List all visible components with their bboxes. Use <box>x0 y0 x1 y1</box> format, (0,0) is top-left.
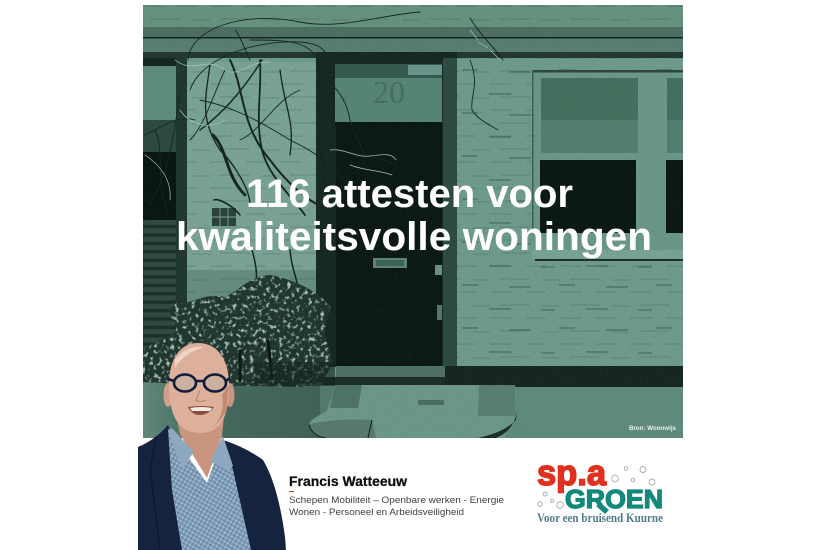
bubbles <box>538 466 655 508</box>
title: 116 attesten voor <box>246 172 573 216</box>
small window in pillar <box>212 208 236 226</box>
left shutter <box>143 220 176 350</box>
door surround <box>316 52 457 367</box>
portrait: Francis Watteeuw <box>138 343 286 550</box>
role description <box>289 495 504 518</box>
left upper panel and window <box>143 58 176 220</box>
dark plinth <box>445 366 683 387</box>
role description: Schepen Mobiliteit – Openbare werken - Energie <box>289 495 504 506</box>
door step <box>316 366 446 385</box>
title: kwaliteitsvolle woningen <box>176 215 652 259</box>
light vine sprigs <box>145 30 500 200</box>
tagline: Voor een bruisend Kuurne <box>537 511 663 525</box>
jacket lapel edge <box>150 437 160 550</box>
glasses <box>168 374 230 392</box>
nose <box>196 390 206 402</box>
upper brick band <box>143 5 683 58</box>
letter slot <box>373 258 407 268</box>
right brick wall <box>457 58 683 367</box>
photo: house facade with green duotone <box>140 5 683 438</box>
role description: Wonen - Personeel en Arbeidsveiligheid <box>289 507 464 518</box>
large right window <box>532 70 683 261</box>
neck <box>176 415 224 478</box>
smile <box>188 406 214 415</box>
red accent dash <box>289 491 294 492</box>
shrub <box>143 275 335 387</box>
vines over pillar <box>145 12 503 300</box>
door hardware <box>435 265 442 275</box>
pavement <box>143 382 683 438</box>
tail of R <box>596 504 609 514</box>
title <box>176 172 652 259</box>
photo credit: Bron: Woonwijs <box>629 425 677 432</box>
transom window with number 20: 20 <box>373 74 405 110</box>
jacket <box>138 425 286 550</box>
sp.a wordmark: sp.a <box>537 452 607 493</box>
curb and sidewalk island <box>309 385 518 438</box>
logo: sp.a Groen <box>537 452 663 525</box>
head <box>169 343 229 433</box>
door <box>336 126 442 366</box>
infographic canvas <box>138 5 683 550</box>
shirt <box>168 429 251 550</box>
brick pillar <box>187 62 316 302</box>
dark pillar <box>176 58 187 308</box>
transom window with number 20 <box>335 64 442 126</box>
ears <box>164 383 172 407</box>
photo grit texture <box>143 5 683 438</box>
name: Francis Watteeuw <box>289 474 408 489</box>
GROEN wordmark: GROEN <box>565 484 663 514</box>
